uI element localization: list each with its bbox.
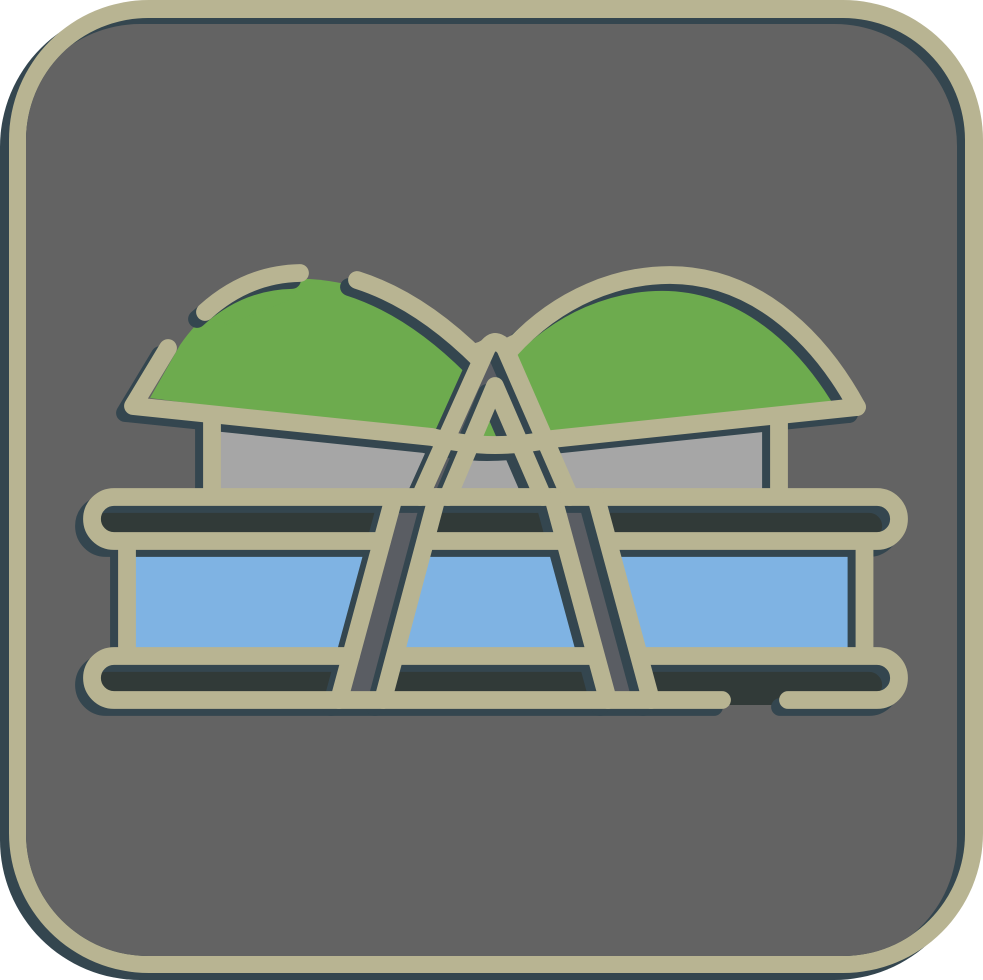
bridge and hills outline xyxy=(92,273,899,700)
tower: lower left leg band xyxy=(339,497,437,700)
tower: inner triangle grey xyxy=(448,445,543,497)
tower: inner triangle green xyxy=(470,386,520,447)
building: grey walls xyxy=(212,415,779,497)
hill: right green dome xyxy=(510,285,857,439)
hill: green patch under top arc xyxy=(222,290,296,325)
deck: top dark bar xyxy=(100,506,890,536)
tower: apex join xyxy=(460,333,516,352)
tower: lower right leg band xyxy=(553,497,651,700)
hill: left green dome xyxy=(150,279,478,437)
linework drop shadow xyxy=(84,280,891,707)
water: blue panel xyxy=(127,545,865,656)
tower: upper A-frame fill xyxy=(420,340,570,497)
deck: bottom dark bar xyxy=(96,660,895,705)
